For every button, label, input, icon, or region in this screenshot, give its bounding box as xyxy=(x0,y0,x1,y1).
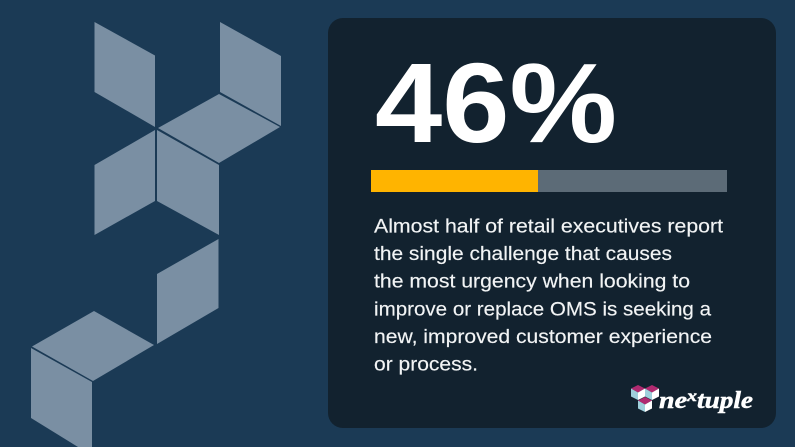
logo wordmark: tuple xyxy=(697,388,753,414)
icon: logo cubes xyxy=(631,385,659,412)
text block: description xyxy=(374,216,724,376)
heading: 46%: 46% xyxy=(375,40,617,166)
logo wordmark: x xyxy=(686,388,697,405)
text block: description: improve or replace OMS is seeking a xyxy=(374,299,711,320)
panel: statistic card xyxy=(328,18,776,428)
text block: description: or process. xyxy=(374,355,478,376)
icon: isometric cube logo mark xyxy=(31,22,281,447)
logo: nextuple xyxy=(631,385,753,414)
text block: description: Almost half of retail executives report xyxy=(374,216,724,237)
progress bar xyxy=(371,170,727,192)
text block: description: the single challenge that causes xyxy=(374,244,672,265)
logo wordmark xyxy=(659,388,753,414)
logo wordmark: ne xyxy=(659,388,687,414)
text block: description: new, improved customer experience xyxy=(374,327,712,348)
text block: description: the most urgency when looking to xyxy=(374,272,690,293)
